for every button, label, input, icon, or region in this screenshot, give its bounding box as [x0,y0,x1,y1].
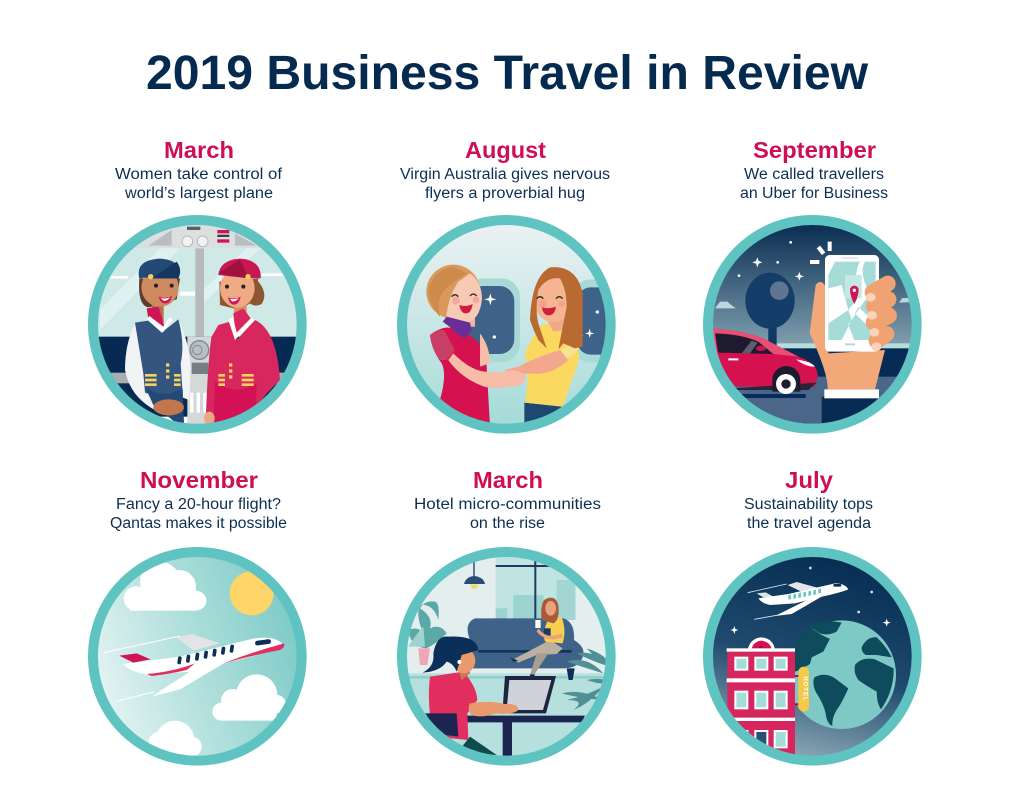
panel: November, 20-hour flight [93,467,302,763]
blue sofa [468,618,584,680]
teal ring [402,220,611,429]
hotel sign: HOTEL [802,676,808,702]
month heading: March: March [473,467,543,493]
title: 2019 Business Travel in Review [146,47,869,100]
leaves in foreground [562,648,606,710]
panel: July, sustainability [708,467,917,763]
month heading: July: July [785,467,833,493]
window with city [496,553,576,620]
aircraft windows [465,278,617,363]
hotel building [727,637,795,755]
flight attendant [426,265,525,427]
description: Uber for Business: an Uber for Business [740,185,888,202]
plane [119,634,284,697]
speed lines [104,636,180,701]
pilot in red uniform [204,259,280,425]
panel: September, Uber for Business [708,137,917,430]
illustration: hand holding phone beside a red car [708,220,917,430]
table and laptop user [422,636,585,762]
panel: March, women pilots [80,137,315,440]
description: Qantas 20-hour flight: Fancy a 20-hour flight? [116,496,281,513]
potted plant [408,601,447,665]
description: sustainability: the travel agenda [747,515,871,532]
globe [787,620,896,729]
hand holding phone [810,242,900,427]
month heading: August: August [465,137,546,163]
description: sustainability: Sustainability tops [744,496,873,513]
tree and moon [745,273,795,345]
description: Uber for Business: We called travellers [744,166,884,183]
teal ring [708,552,917,761]
passenger in yellow top [498,267,583,427]
description: hotel micro-communities: on the rise [470,515,545,532]
description: Virgin Australia hug [400,166,610,202]
pendant lamp [464,562,485,589]
description: hotel micro-communities [414,496,601,532]
teal ring [93,220,302,429]
panel: August, nervous flyers [400,137,617,430]
illustration: flight attendant holding a passenger's hands [402,220,617,430]
description: sustainability [744,496,873,532]
illustration: two pilots in a cockpit [88,215,307,434]
description: women take control: Women take control of [115,166,283,183]
clouds [124,562,286,759]
woman on the sofa [510,598,564,678]
illustration: hotel lounge with two women [402,550,613,762]
red car [708,328,818,398]
illustration: plane among clouds [93,550,302,763]
description: Virgin Australia hug: Virgin Australia gives nervous [400,166,610,183]
sun [230,571,274,615]
panel: March, hotel micro-communities [402,467,613,762]
pilot in navy uniform [125,259,191,423]
description: Uber for Business [740,166,888,202]
month heading: November: November [140,467,258,493]
description: Virgin Australia hug: flyers a proverbial hug [425,185,585,202]
illustration: plane, globe and hotel [708,550,917,763]
teal ring [93,552,302,761]
hotel sign [795,667,809,712]
description: Qantas 20-hour flight: Qantas makes it possible [110,515,287,532]
plane [748,582,848,619]
month heading: September: September [753,137,876,163]
month heading: March: March [164,137,234,163]
description: women take control [115,166,283,202]
description: women take control: world’s largest plane [124,185,273,202]
description: hotel micro-communities: Hotel micro-communities [414,496,601,513]
teal ring [402,552,611,761]
description: Qantas 20-hour flight [110,496,287,532]
teal ring [708,220,917,429]
